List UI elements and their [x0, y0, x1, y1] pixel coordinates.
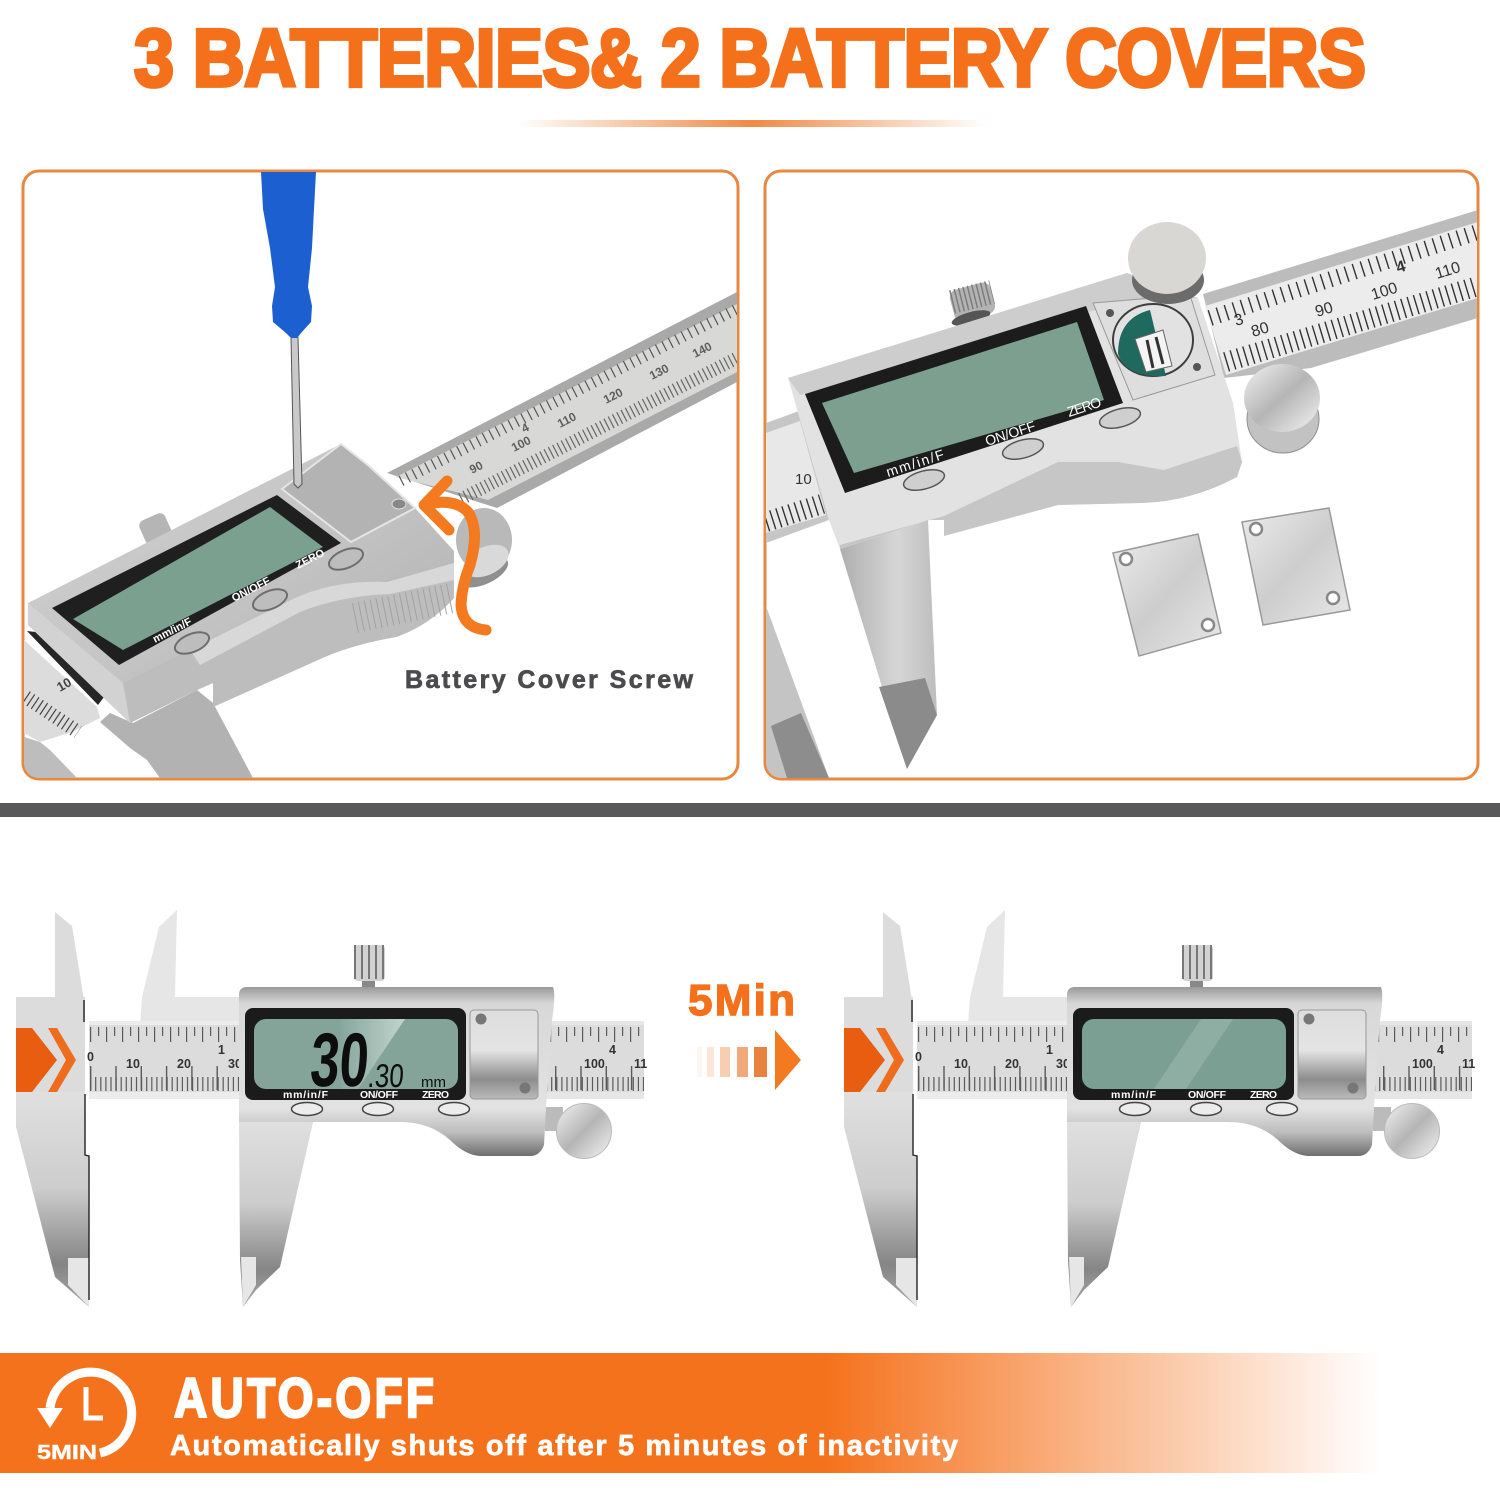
screwdriver [261, 172, 316, 488]
buttons, left photo [172, 544, 366, 658]
beam: 11 [1462, 1057, 1475, 1071]
caliper body, left photo [28, 444, 454, 723]
body [1067, 987, 1382, 1156]
caliper: display on [16, 910, 647, 1307]
ruler beam, left photo: 130 [647, 361, 671, 383]
beam [915, 1021, 1475, 1099]
left ruler stub: 10 [54, 674, 74, 695]
battery cover [1298, 1010, 1366, 1099]
wheel stem [1373, 1107, 1391, 1131]
caliper body, right photo [788, 273, 1242, 549]
beam: 4 [609, 1043, 616, 1057]
LCD frame [1073, 1008, 1294, 1100]
fixed jaw corner, left photo [24, 737, 77, 778]
second upper jaw [140, 910, 240, 1025]
button labels, left photo: ON/OFF [230, 575, 273, 605]
button labels: mm/in/F [1111, 1089, 1157, 1101]
moving jaw, left photo [100, 690, 253, 778]
buttons, right photo [901, 404, 1143, 494]
title: 3 BATTERIES& 2 BATTERY COVERS [134, 13, 1366, 104]
button labels: mm/in/F [283, 1089, 329, 1101]
ruler beam, right photo: 100 [1369, 280, 1400, 304]
LCD display, left photo [52, 495, 341, 665]
jaw tip [896, 1258, 917, 1307]
ruler beam, left photo: 140 [690, 339, 714, 361]
cover screw [392, 499, 406, 509]
thumb knob [354, 945, 385, 987]
fixed jaw upper [883, 912, 912, 1025]
description: Automatically shuts off after 5 minutes of inactivity [170, 1430, 958, 1462]
left ruler stub, right photo [766, 411, 829, 543]
lower fixed jaw [844, 1092, 917, 1307]
beam: 30 [1056, 1057, 1070, 1071]
head block [844, 997, 913, 1097]
callout: battery cover screw: Battery Cover Screw [405, 666, 694, 694]
buttons [1120, 1102, 1298, 1116]
ruler beam, right photo: 80 [1249, 319, 1271, 341]
button labels: ZERO [1250, 1089, 1277, 1101]
beam [87, 1021, 647, 1099]
fixed jaw, right photo [766, 606, 829, 778]
heading: auto-off: AUTO-OFF [174, 1367, 434, 1429]
ruler beam, right photo: 4 [1394, 258, 1408, 277]
ruler beam, left photo [387, 292, 737, 508]
moving jaw tip [241, 1257, 256, 1307]
left ruler stub, right photo: 10 [795, 471, 812, 488]
beam: 20 [177, 1057, 191, 1071]
wheel, right photo [1244, 364, 1320, 453]
button labels, left photo: mm/in/F [151, 616, 194, 646]
title underline [518, 120, 986, 127]
button labels [1111, 1089, 1277, 1101]
orange chevrons [16, 1028, 76, 1092]
beam: 1 [1046, 1043, 1053, 1057]
moving jaw tip [1069, 1257, 1084, 1307]
ruler beam, right photo: 90 [1313, 299, 1335, 321]
LCD highlight [1154, 1019, 1233, 1089]
beam: 30 [228, 1057, 242, 1071]
coin battery [1128, 222, 1206, 304]
ruler beam, left photo: 100 [509, 433, 533, 455]
battery cover plate, left photo [282, 444, 415, 542]
jaw edge shadows [912, 1000, 917, 1300]
LCD reading: 30 [308, 1018, 372, 1103]
button labels: ON/OFF [1188, 1089, 1227, 1101]
beam: 10 [954, 1057, 968, 1071]
moving jaw [239, 1118, 314, 1307]
caliper: display off [844, 910, 1475, 1307]
LCD reading: .30 [366, 1058, 405, 1095]
ruler beam, left photo: 110 [555, 409, 579, 431]
beam: 1 [218, 1043, 225, 1057]
wheel [556, 1104, 612, 1158]
button labels: ZERO [422, 1089, 449, 1101]
button labels [283, 1089, 449, 1101]
thumb knob, left photo [139, 513, 172, 543]
ruler beam, right photo: 3 [1232, 311, 1246, 330]
battery cover plate 1 [1113, 534, 1221, 656]
battery cover [470, 1010, 538, 1099]
wheel stem [545, 1107, 563, 1131]
ruler beam, right photo [1203, 210, 1478, 378]
arrow: 5 minutes later [697, 1030, 801, 1090]
button labels, right photo: ON/OFF [983, 418, 1037, 449]
LCD reading: mm [421, 1074, 446, 1091]
LCD display, right photo [805, 306, 1123, 493]
beam: 10 [126, 1057, 140, 1071]
LCD highlight [340, 1019, 405, 1089]
timing label: 5Min [688, 976, 795, 1025]
beam: 4 [1437, 1043, 1444, 1057]
second upper jaw [968, 910, 1068, 1025]
left ruler stub [24, 631, 104, 742]
body [239, 987, 554, 1156]
auto-off banner [0, 1353, 1500, 1473]
moving jaw, right photo [840, 520, 937, 769]
lower fixed jaw [16, 1092, 89, 1307]
wheel [1384, 1104, 1440, 1158]
ruler beam, left photo: 120 [601, 385, 625, 407]
jaw tip [68, 1258, 89, 1307]
thumb wheel, left photo [456, 508, 512, 588]
moving jaw [1067, 1118, 1142, 1307]
LCD reading [308, 1018, 446, 1103]
beam: 20 [1005, 1057, 1019, 1071]
thumb knob [1182, 945, 1213, 987]
ruler beam, left photo: 4 [519, 420, 532, 436]
orange chevrons [844, 1028, 904, 1092]
thumb knob, right photo [948, 281, 997, 329]
button labels, right photo: ZERO [1065, 394, 1103, 420]
button labels: ON/OFF [360, 1089, 399, 1101]
LCD screen [254, 1019, 458, 1089]
icon: auto-off timer: 5MIN [37, 1442, 97, 1464]
panel: battery cover screw [23, 171, 738, 779]
beam: 100 [1412, 1057, 1433, 1071]
battery cover plate 2 [1242, 508, 1350, 625]
fixed jaw upper [55, 912, 84, 1025]
beam: 0 [87, 1050, 94, 1064]
button labels, right photo [886, 398, 1100, 477]
beam: 0 [915, 1050, 922, 1064]
battery compartment [1093, 295, 1215, 400]
button labels, left photo: ZERO [294, 547, 327, 572]
buttons [292, 1102, 470, 1116]
LCD screen [1082, 1019, 1286, 1089]
jaw edge shadows [84, 1000, 89, 1300]
ruler beam, right photo: 110 [1433, 259, 1463, 283]
button labels, right photo: mm/in/F [884, 446, 946, 480]
LCD frame [245, 1008, 466, 1100]
section divider [0, 803, 1500, 817]
button labels, left photo [151, 547, 327, 646]
orange curved arrow [424, 481, 486, 630]
head block [16, 997, 85, 1097]
ruler beam, left photo: 90 [467, 458, 486, 477]
icon: auto-off timer [37, 1372, 132, 1464]
beam: 11 [634, 1057, 647, 1071]
beam: 100 [584, 1057, 605, 1071]
panel: open battery compartment [765, 171, 1478, 779]
